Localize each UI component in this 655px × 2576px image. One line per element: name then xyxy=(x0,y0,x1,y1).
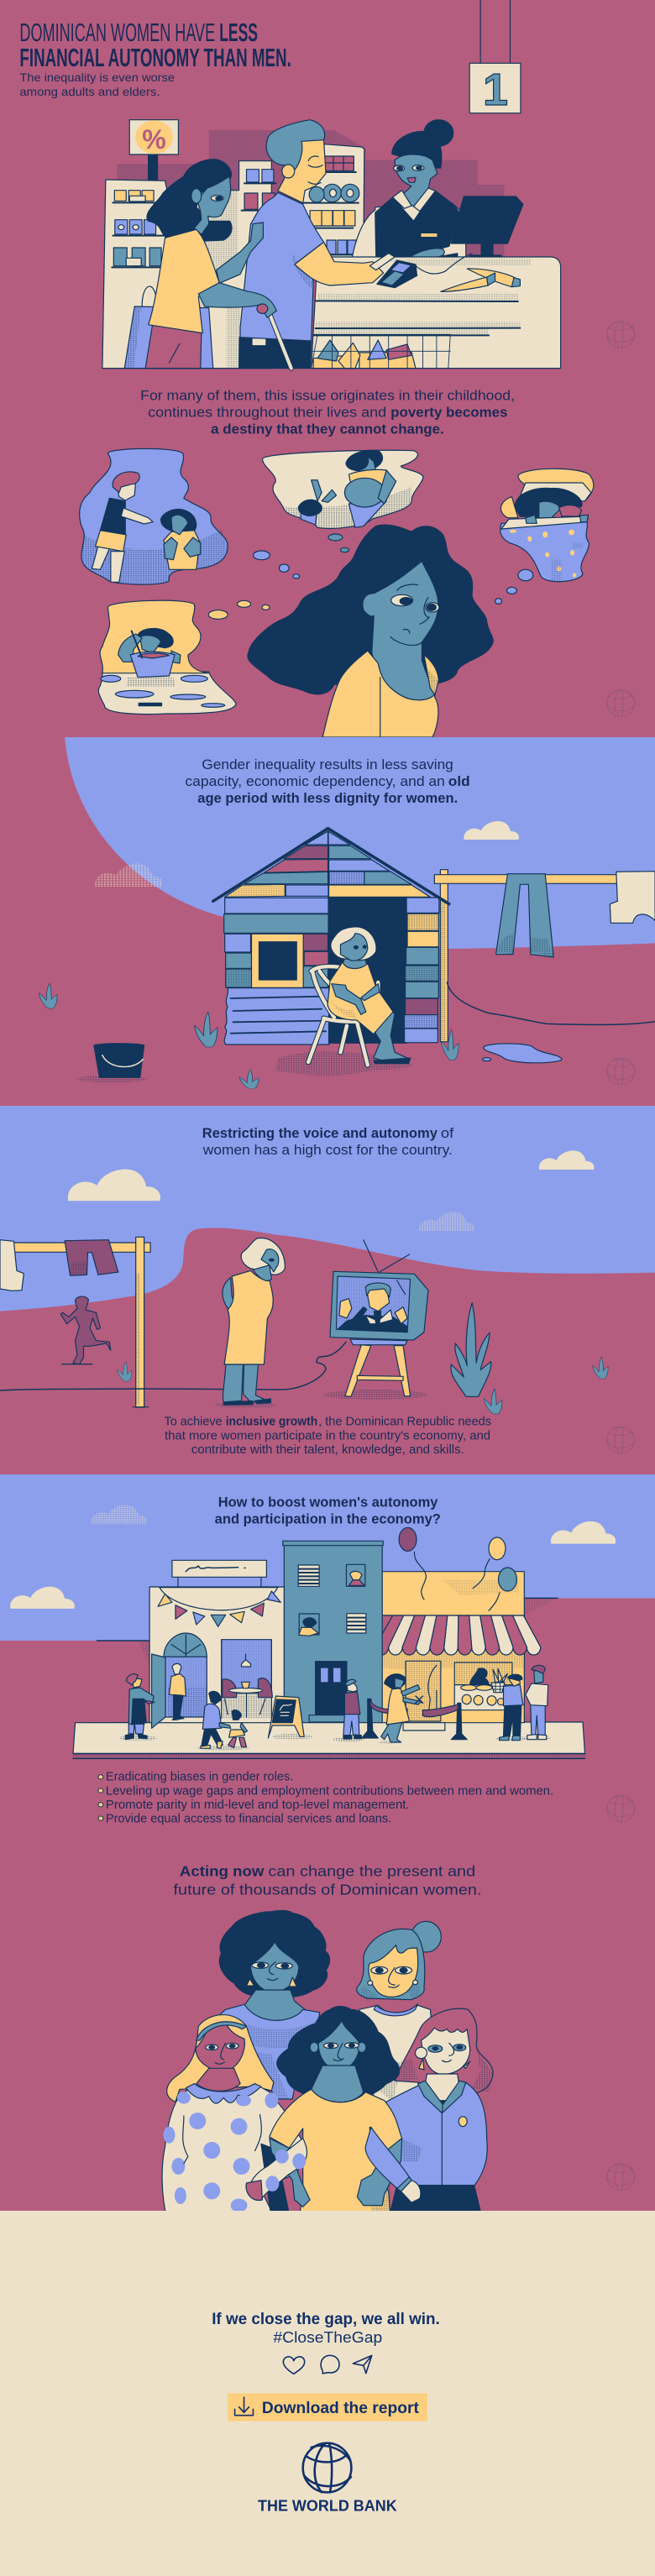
text block: acting now: future of thousands of Dominican women. xyxy=(173,1882,482,1898)
sky xyxy=(0,1474,655,1641)
plants xyxy=(117,1303,608,1414)
thought: child in bed xyxy=(500,469,594,582)
text block: acting now: can change the present and xyxy=(268,1862,475,1879)
cafe customer xyxy=(169,1663,186,1720)
wire xyxy=(0,1342,346,1390)
heading: how to boost xyxy=(215,1495,441,1526)
seated old woman xyxy=(275,927,414,1076)
logo watermark xyxy=(607,689,635,716)
text block: restricting voice: Restricting the voice and autonomy xyxy=(202,1126,438,1141)
text block: inclusive growth: that more women participate in the country's economy, and xyxy=(165,1429,490,1442)
panel: supermarket checkout xyxy=(102,0,635,369)
text block: childhood origin: poverty becomes xyxy=(390,406,507,421)
logo watermark xyxy=(607,1058,635,1085)
computer monitor xyxy=(411,196,523,264)
title xyxy=(19,18,291,72)
logo watermark xyxy=(607,321,635,348)
list bullets xyxy=(98,1775,103,1820)
bullet list: Eradicating biases in gender roles. xyxy=(106,1771,293,1784)
cream cafe xyxy=(149,1560,284,1728)
text block: childhood origin xyxy=(140,389,515,437)
thoughtful woman xyxy=(248,525,493,737)
sidewalk xyxy=(73,1722,584,1758)
logo watermark xyxy=(607,1795,635,1822)
title: FINANCIAL AUTONOMY THAN MEN. xyxy=(19,43,291,72)
puddle xyxy=(483,1044,562,1063)
man with card xyxy=(239,120,395,369)
bullet list xyxy=(106,1771,553,1826)
television xyxy=(323,1240,428,1400)
sandwich board xyxy=(268,1696,312,1740)
number on sign: 1 xyxy=(483,65,508,115)
woman helping xyxy=(145,160,276,369)
logo watermark xyxy=(607,1427,635,1453)
panel: street of shops xyxy=(0,1474,655,1822)
bullet list: Provide equal access to financial services and loans. xyxy=(106,1813,391,1826)
text block: acting now xyxy=(173,1862,482,1898)
bakery window xyxy=(454,1662,512,1710)
right woman xyxy=(368,2008,493,2211)
left woman xyxy=(162,2015,307,2219)
thought: pregnant mother xyxy=(262,450,423,528)
text block: gender inequality xyxy=(185,757,470,806)
bullet list: Leveling up wage gaps and employment contributions between men and women. xyxy=(106,1784,553,1798)
sky and hill xyxy=(0,1106,655,1312)
icon: share xyxy=(353,2355,372,2374)
text block: gender inequality: old xyxy=(448,774,470,789)
teal building xyxy=(283,1541,383,1723)
building shadows xyxy=(138,1598,560,1723)
panel: high cost for the country xyxy=(0,1106,655,1453)
back left woman xyxy=(213,1911,330,2099)
hanging number sign xyxy=(469,0,521,113)
bullet list: Promote parity in mid-level and top-level management. xyxy=(106,1798,410,1812)
price sign xyxy=(129,120,178,182)
clouds xyxy=(95,821,519,887)
thought: cooking child xyxy=(98,600,236,715)
grass tufts xyxy=(39,983,458,1088)
title: DOMINICAN WOMEN HAVE xyxy=(19,18,215,47)
wordmark: The World Bank: THE WORLD BANK xyxy=(258,2497,397,2515)
text block: gender inequality: Gender inequality results in less saving xyxy=(202,757,453,772)
old woman standing xyxy=(214,1238,285,1408)
ribbon and stands xyxy=(362,1699,378,1738)
text block: restricting voice: women has a high cost for the country. xyxy=(202,1143,453,1158)
button label: Download the report xyxy=(262,2400,420,2417)
awning xyxy=(361,1615,541,1655)
World Bank globe xyxy=(303,2443,351,2492)
text block: restricting voice xyxy=(202,1126,454,1158)
text block: inclusive growth: To achieve xyxy=(165,1416,223,1429)
clouds xyxy=(10,1505,616,1609)
shopping bag xyxy=(124,286,213,369)
cashier xyxy=(351,120,466,264)
text block: inclusive growth: contribute with their talent, knowledge, and skills. xyxy=(191,1443,464,1457)
plastic chair xyxy=(308,966,378,1065)
card terminal xyxy=(377,260,417,288)
panel: old age house xyxy=(39,737,655,1088)
house xyxy=(213,829,449,1045)
running silhouette xyxy=(60,1296,111,1364)
text block: inclusive growth: inclusive growth xyxy=(226,1416,317,1429)
footer icons and logo xyxy=(228,2355,427,2492)
doorstep xyxy=(403,1723,445,1730)
text block: inclusive growth xyxy=(165,1416,491,1457)
text block: gender inequality: age period with less dignity for women. xyxy=(197,791,458,806)
clothesline xyxy=(0,1237,150,1407)
call to action text: If we close the gap, we all win. xyxy=(212,2311,440,2328)
call to action text xyxy=(212,2311,440,2346)
title: LESS xyxy=(219,18,258,47)
bucket xyxy=(78,1044,146,1083)
checkout counter xyxy=(312,254,561,369)
text block: childhood origin: a destiny that they cannot change. xyxy=(211,422,444,437)
text block: childhood origin: continues throughout their lives and xyxy=(148,406,386,421)
logo watermark xyxy=(607,2164,635,2191)
thought: scolded child xyxy=(80,448,228,584)
panel: group of women xyxy=(162,1911,635,2219)
carrots xyxy=(441,269,520,291)
clothesline xyxy=(434,870,655,1042)
heading: how to boost: How to boost women's autonomy xyxy=(218,1495,438,1510)
heading: how to boost: and participation in the economy? xyxy=(215,1511,441,1526)
icon: heart xyxy=(283,2357,305,2374)
text block: inclusive growth: , the Dominican Republic needs xyxy=(318,1416,491,1429)
street people xyxy=(119,1665,550,1751)
text block: acting now: Acting now xyxy=(180,1862,265,1879)
download button xyxy=(228,2393,427,2422)
shopping cart xyxy=(312,334,450,369)
thought bubbles xyxy=(208,534,533,619)
subtitle: among adults and elders. xyxy=(19,85,160,98)
cane xyxy=(270,313,291,369)
panel: thoughts about childhood xyxy=(80,448,635,737)
text block: childhood origin: For many of them, this issue originates in their childhood, xyxy=(140,389,515,404)
icon: comment xyxy=(321,2355,339,2374)
bakery door xyxy=(406,1661,441,1721)
clouds xyxy=(68,1150,594,1231)
call to action text: #CloseTheGap xyxy=(273,2329,382,2346)
subtitle xyxy=(19,71,175,98)
subtitle: The inequality is even worse xyxy=(19,71,175,84)
shelves xyxy=(102,144,364,369)
footer background xyxy=(0,2211,655,2576)
back right woman xyxy=(357,1921,441,2110)
sky xyxy=(65,737,655,949)
text block: restricting voice: of xyxy=(441,1126,454,1141)
yellow bakery xyxy=(361,1572,541,1730)
text block: gender inequality: capacity, economic dependency, and an xyxy=(185,774,445,789)
balloons xyxy=(399,1527,516,1610)
percent glyph: % xyxy=(142,124,166,154)
center woman xyxy=(246,2006,421,2219)
hatched wall shadow xyxy=(117,130,504,259)
